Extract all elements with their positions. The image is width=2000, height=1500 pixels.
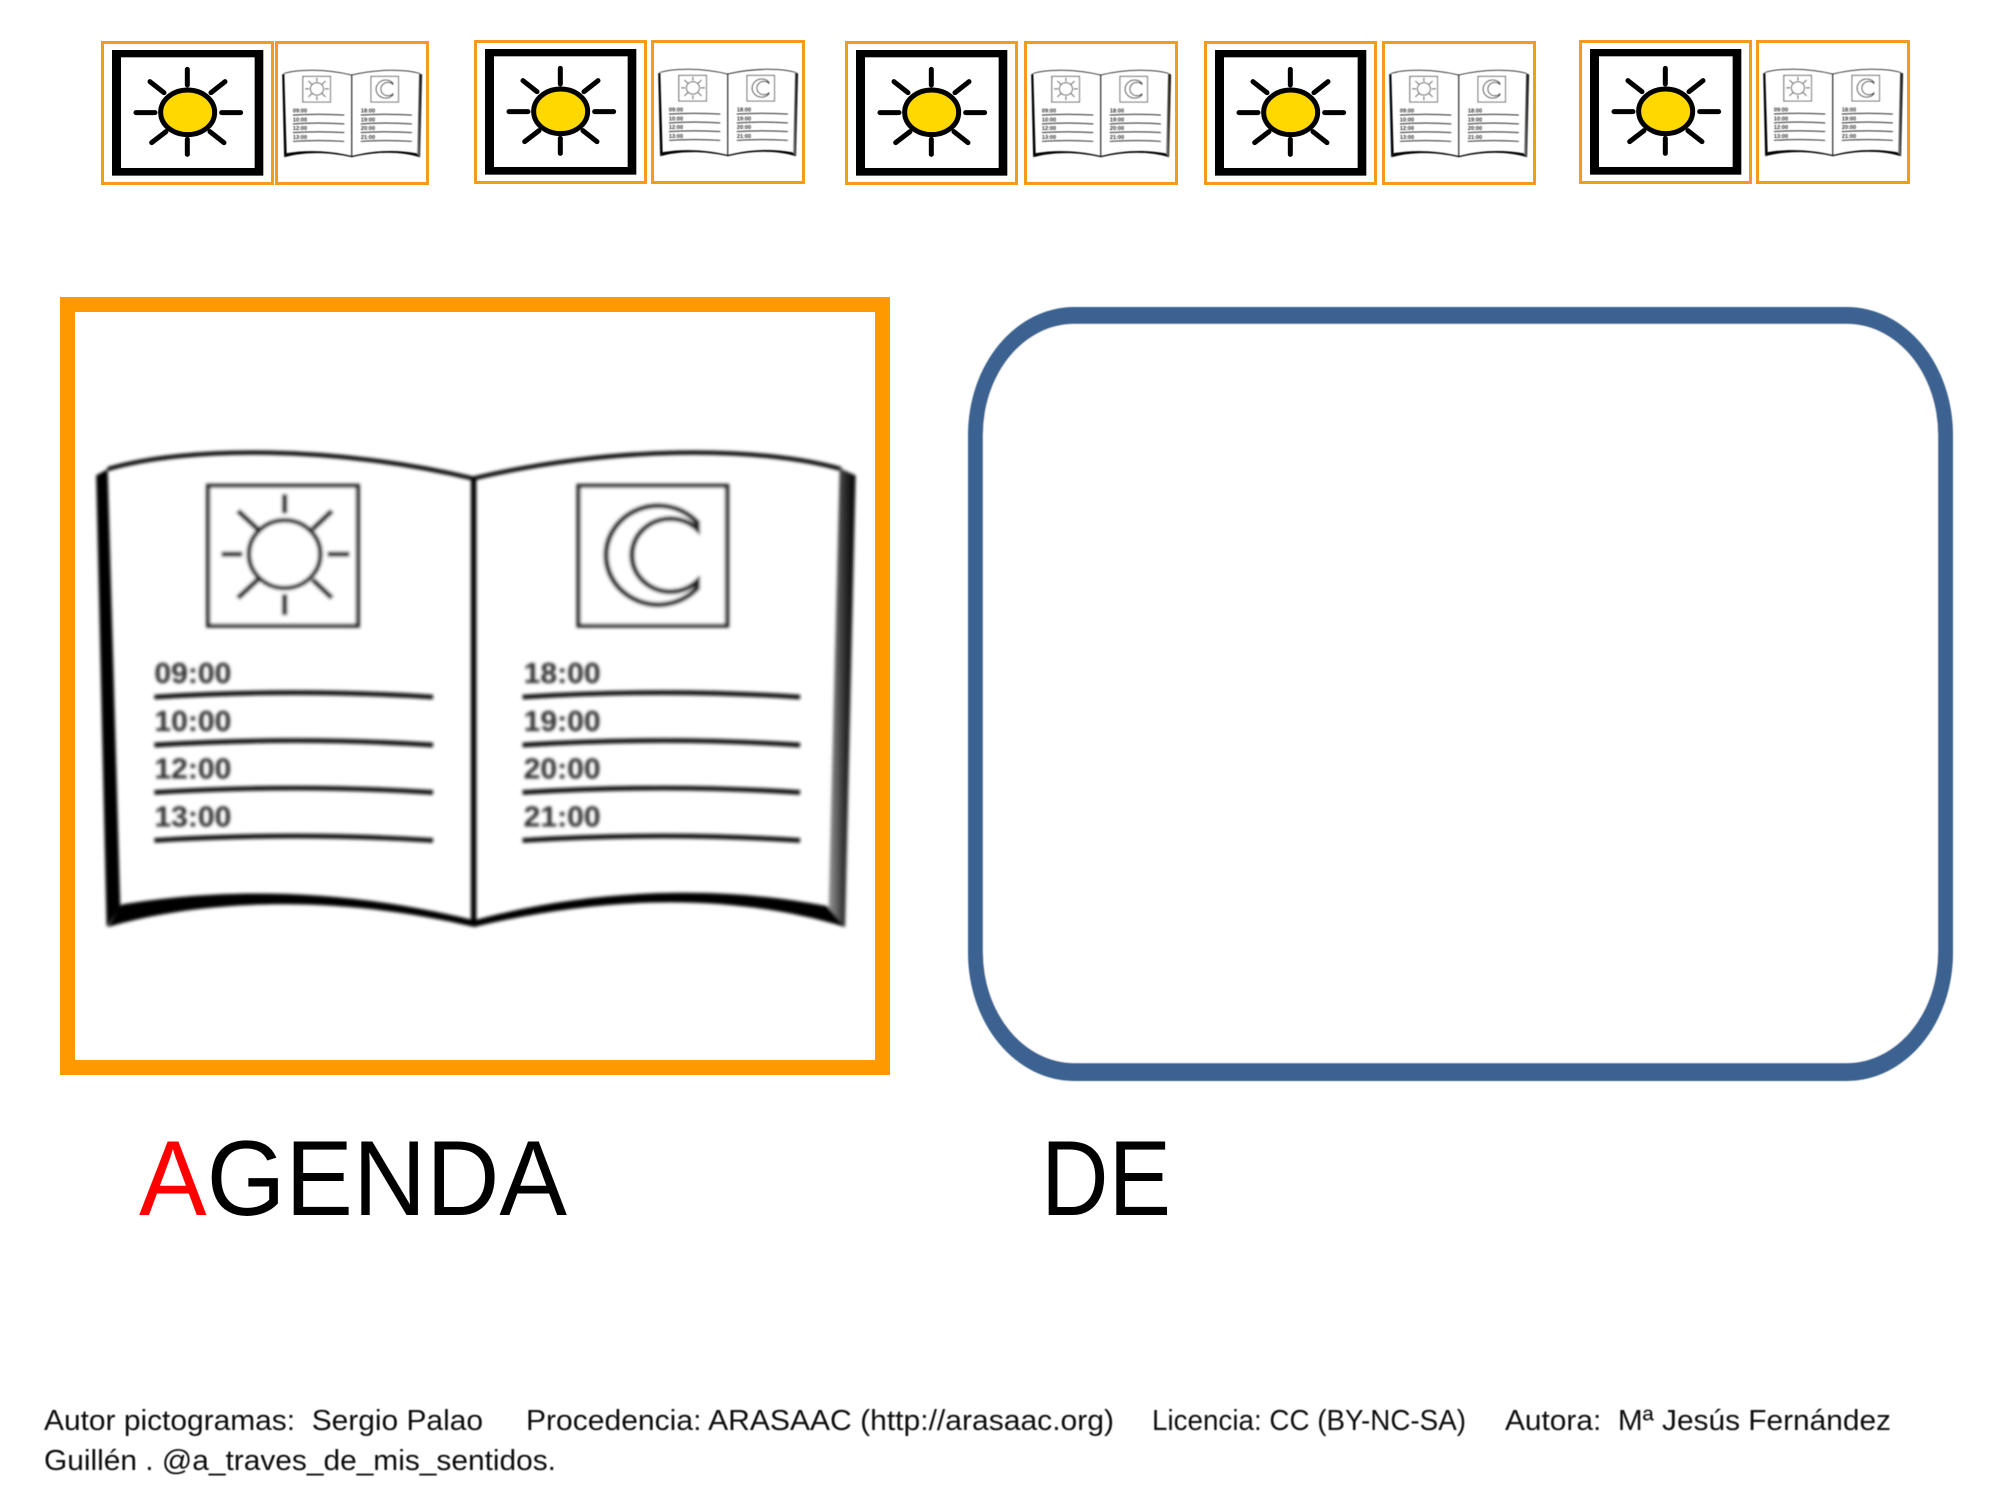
icon: open agenda book: 18:00 bbox=[524, 658, 601, 690]
top strip: pictogram set 3 bbox=[846, 42, 1176, 184]
icon: agenda book card: 10:00 bbox=[293, 117, 307, 123]
icon: agenda book card: 21:00 bbox=[737, 134, 751, 140]
footer credits: Autora: Mª Jesús Fernández bbox=[1505, 1405, 1891, 1437]
icon: agenda book card: 20:00 bbox=[1468, 126, 1482, 132]
heading: AGENDA: AGENDA bbox=[139, 1118, 568, 1238]
icon: agenda book card: 20:00 bbox=[1110, 126, 1124, 132]
icon: agenda book card: 18:00 bbox=[1468, 109, 1482, 114]
icon: agenda book card: 13:00 bbox=[1774, 134, 1788, 140]
icon: agenda book card: 19:00 bbox=[1468, 117, 1482, 123]
icon: agenda book card: 09:00 bbox=[669, 108, 683, 113]
icon: agenda book card: 18:00 bbox=[361, 109, 375, 114]
top strip: pictogram set 5 bbox=[1580, 42, 1908, 182]
icon: agenda book card bbox=[1758, 42, 1908, 182]
icon: agenda book card: 12:00 bbox=[669, 125, 683, 131]
panel: large agenda book pictogram bbox=[68, 304, 882, 1068]
icon: agenda book card: 09:00 bbox=[1774, 108, 1788, 113]
icon: agenda book card: 19:00 bbox=[361, 117, 375, 123]
footer credits: Guillén . @a_traves_de_mis_sentidos. bbox=[44, 1445, 556, 1477]
footer credits: Licencia: CC (BY-NC-SA) bbox=[1152, 1405, 1466, 1437]
footer credits: Procedencia: ARASAAC (http://arasaac.org) bbox=[526, 1405, 1114, 1437]
icon: open agenda book: 13:00 bbox=[154, 801, 231, 833]
icon: agenda book card: 10:00 bbox=[1042, 117, 1056, 123]
icon: agenda book card: 21:00 bbox=[1468, 135, 1482, 141]
icon: sun card bbox=[476, 42, 646, 182]
icon: agenda book card: 10:00 bbox=[1400, 117, 1414, 123]
icon: agenda book card: 12:00 bbox=[293, 126, 307, 132]
icon: sun card bbox=[1206, 42, 1376, 184]
icon: agenda book card bbox=[276, 42, 428, 184]
icon: agenda book card: 21:00 bbox=[1110, 135, 1124, 141]
icon: agenda book card: 18:00 bbox=[737, 108, 751, 113]
icon: agenda book card: 19:00 bbox=[1842, 116, 1856, 122]
top strip: pictogram set 2 bbox=[476, 42, 804, 182]
top strip: pictogram set 1 bbox=[102, 42, 428, 184]
icon: agenda book card bbox=[1384, 42, 1534, 184]
icon: agenda book card: 13:00 bbox=[1400, 135, 1414, 141]
icon: agenda book card: 20:00 bbox=[361, 126, 375, 132]
icon: agenda book card: 20:00 bbox=[737, 125, 751, 131]
icon: agenda book card bbox=[652, 42, 804, 182]
icon: agenda book card: 12:00 bbox=[1042, 126, 1056, 132]
icon: agenda book card: 12:00 bbox=[1774, 125, 1788, 131]
icon: sun card bbox=[1580, 42, 1750, 182]
icon: agenda book card: 09:00 bbox=[1042, 109, 1056, 114]
icon: agenda book card: 18:00 bbox=[1842, 108, 1856, 113]
icon: agenda book card: 19:00 bbox=[737, 116, 751, 122]
icon: sun card bbox=[846, 42, 1016, 184]
icon: open agenda book: 19:00 bbox=[524, 706, 601, 738]
icon: agenda book card: 13:00 bbox=[1042, 135, 1056, 141]
top strip: pictogram set 4 bbox=[1206, 42, 1534, 184]
icon: agenda book card: 19:00 bbox=[1110, 117, 1124, 123]
heading: DE: DE bbox=[1041, 1118, 1171, 1238]
icon: agenda book card: 20:00 bbox=[1842, 125, 1856, 131]
footer credits bbox=[44, 1405, 1891, 1477]
icon: open agenda book: 09:00 bbox=[154, 658, 231, 690]
icon: agenda book card: 09:00 bbox=[1400, 109, 1414, 114]
icon: open agenda book: 12:00 bbox=[154, 753, 231, 785]
icon: agenda book card: 12:00 bbox=[1400, 126, 1414, 132]
footer credits: Autor pictogramas: Sergio Palao bbox=[44, 1405, 483, 1437]
icon: open agenda book: 20:00 bbox=[524, 753, 601, 785]
icon: open agenda book: 21:00 bbox=[524, 801, 601, 833]
icon: agenda book card: 21:00 bbox=[1842, 134, 1856, 140]
icon: agenda book card: 09:00 bbox=[293, 109, 307, 114]
icon: agenda book card: 10:00 bbox=[669, 116, 683, 122]
icon: agenda book card: 13:00 bbox=[293, 135, 307, 141]
icon: sun card bbox=[102, 42, 272, 184]
panel: empty blue rounded frame bbox=[968, 307, 1953, 1081]
icon: agenda book card: 21:00 bbox=[361, 135, 375, 141]
icon: open agenda book: 10:00 bbox=[154, 706, 231, 738]
icon: agenda book card: 13:00 bbox=[669, 134, 683, 140]
icon: open agenda book bbox=[96, 453, 856, 927]
icon: agenda book card: 10:00 bbox=[1774, 116, 1788, 122]
icon: agenda book card: 18:00 bbox=[1110, 109, 1124, 114]
icon: agenda book card bbox=[1026, 42, 1176, 184]
